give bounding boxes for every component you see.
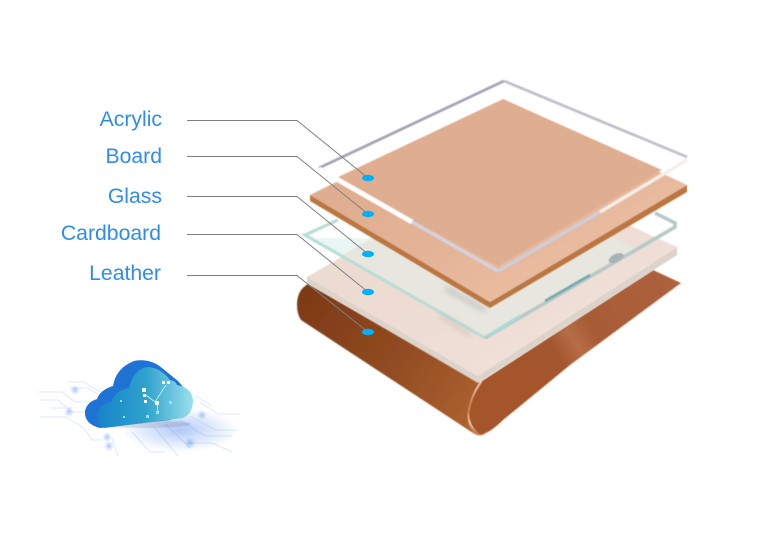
board edge: [310, 185, 687, 308]
leader: Acrylic: [187, 120, 374, 181]
leader: Leather: [187, 276, 374, 335]
label: Board: Board: [105, 145, 162, 168]
leader: Board: [187, 156, 374, 217]
leather layer: [297, 270, 681, 435]
label: Glass: Glass: [108, 185, 162, 208]
glass layer: [305, 213, 675, 338]
cardboard top: [307, 165, 677, 376]
labels: [61, 108, 162, 285]
glow: [122, 408, 238, 452]
glass over empty background: [305, 219, 400, 255]
leather curl edge: [468, 382, 484, 435]
cloud shadow: [99, 420, 191, 428]
label: Acrylic: Acrylic: [100, 108, 162, 131]
board layer: [310, 99, 687, 308]
shadows on glass: [440, 288, 485, 335]
cloud face: [98, 367, 193, 428]
board top: [310, 99, 687, 302]
acrylic front edges: [319, 169, 412, 222]
acrylic back edges: [319, 81, 504, 168]
acrylic pane: [319, 81, 687, 178]
label: Cardboard: Cardboard: [61, 222, 161, 245]
glass front-left edge: [305, 220, 485, 338]
leader: Glass: [187, 196, 374, 257]
leather back sheet: [469, 270, 681, 435]
cloud back: [85, 360, 190, 428]
circuit nodes: [142, 381, 170, 405]
label: Leather: Leather: [89, 262, 161, 285]
leather front fold: [297, 284, 480, 435]
leader lines and markers: [187, 120, 374, 335]
circuit traces: [38, 382, 240, 456]
leader: Cardboard: [187, 234, 374, 295]
glass pane: [342, 236, 635, 335]
cardboard layer: [307, 165, 677, 383]
acrylic layer: [319, 81, 687, 271]
icon: cloud on circuit board: [38, 360, 240, 456]
cardboard edge: [307, 247, 677, 383]
glass front-right edge: [485, 213, 675, 338]
